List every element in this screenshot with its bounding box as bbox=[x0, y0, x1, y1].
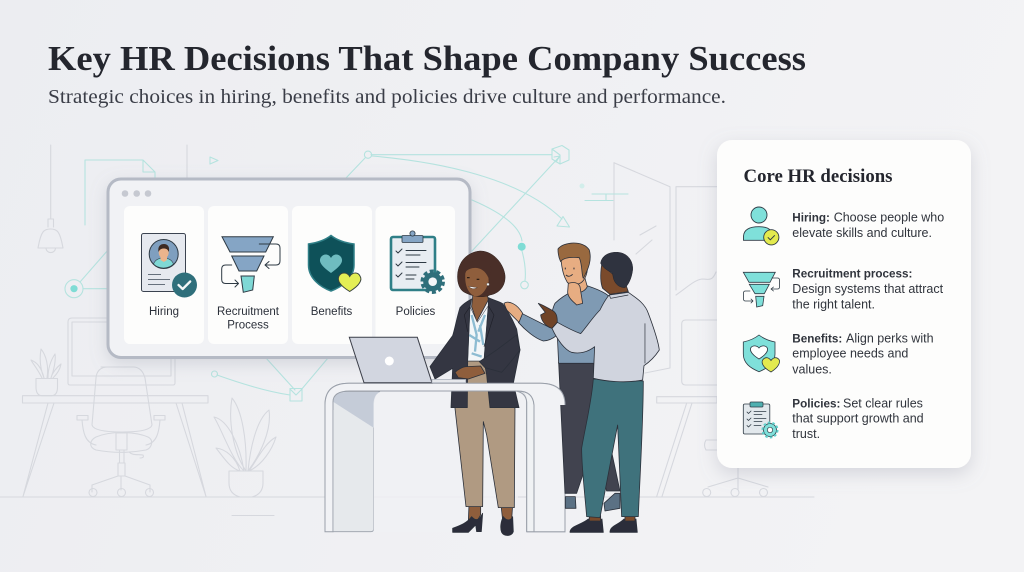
icon: funnel bbox=[222, 237, 280, 292]
panel heading: Core HR decisions bbox=[744, 167, 892, 187]
illustration: laptop bbox=[349, 337, 466, 383]
illustration: front man in white shirt bbox=[538, 252, 659, 532]
icon: shield small bbox=[743, 335, 780, 372]
title: Key HR Decisions That Shape Company Success bbox=[48, 39, 806, 78]
text: hiring: elevate skills and culture. bbox=[792, 226, 932, 240]
text: policies: Policies: bbox=[792, 397, 840, 410]
item: hiring bbox=[744, 207, 944, 245]
label: policies: Policies bbox=[396, 306, 436, 318]
text: recruitment process: Design systems that attract bbox=[792, 282, 944, 296]
panel: core HR decisions bbox=[717, 140, 971, 468]
text: benefits: values. bbox=[792, 362, 832, 376]
plant on desk bbox=[31, 349, 61, 396]
icon: funnel small bbox=[743, 272, 780, 307]
label: benefits: Benefits bbox=[311, 306, 353, 318]
icon: person with check bbox=[744, 207, 779, 245]
illustration: back man in blue sweater bbox=[504, 243, 620, 511]
card: recruitment process bbox=[208, 206, 288, 344]
label: recruitment process: Process bbox=[227, 320, 269, 332]
text: policies: Set clear rules bbox=[843, 396, 923, 410]
icon: shield with hearts bbox=[308, 236, 361, 292]
item: recruitment process bbox=[743, 268, 944, 312]
text: benefits: employee needs and bbox=[792, 347, 908, 361]
item: benefits bbox=[743, 331, 934, 376]
text: hiring: Choose people who bbox=[834, 211, 944, 225]
text: recruitment process: the right talent. bbox=[792, 298, 875, 312]
card: benefits bbox=[292, 206, 372, 344]
floor plant bbox=[214, 398, 276, 497]
illustration: woman at laptop bbox=[430, 251, 520, 535]
monitor left bbox=[68, 318, 175, 385]
desk top band in front of woman bbox=[325, 383, 565, 410]
text: benefits: Benefits: bbox=[792, 332, 842, 345]
window dots bbox=[122, 190, 151, 197]
node: teal dot bbox=[518, 243, 526, 251]
office chair bbox=[77, 367, 165, 496]
icon: clipboard with gear bbox=[391, 231, 443, 292]
card: hiring bbox=[124, 206, 204, 344]
text: policies: trust. bbox=[792, 427, 820, 441]
label: hiring: Hiring bbox=[149, 306, 179, 318]
illustration: standing desk bbox=[325, 383, 565, 532]
text: benefits: Align perks with bbox=[846, 331, 934, 345]
panel: browser window bbox=[108, 179, 470, 358]
right office line art bbox=[614, 163, 768, 496]
icon: pendant lamp bbox=[38, 145, 63, 253]
icon: candidate profile bbox=[142, 234, 197, 298]
desk left bbox=[22, 396, 208, 496]
text: policies: that support growth and bbox=[792, 412, 924, 426]
text: hiring: Hiring: bbox=[792, 212, 830, 225]
card: policies bbox=[376, 206, 455, 344]
subtitle: Strategic choices in hiring, benefits and policies drive culture and performance. bbox=[48, 86, 726, 108]
background illustration: left office line art bbox=[0, 145, 814, 516]
text: recruitment process: Recruitment process: bbox=[792, 268, 912, 281]
icon: clipboard small bbox=[743, 402, 778, 438]
item: policies bbox=[743, 396, 924, 441]
network lines and nodes bbox=[65, 146, 628, 401]
label: recruitment process: Recruitment bbox=[217, 306, 280, 318]
